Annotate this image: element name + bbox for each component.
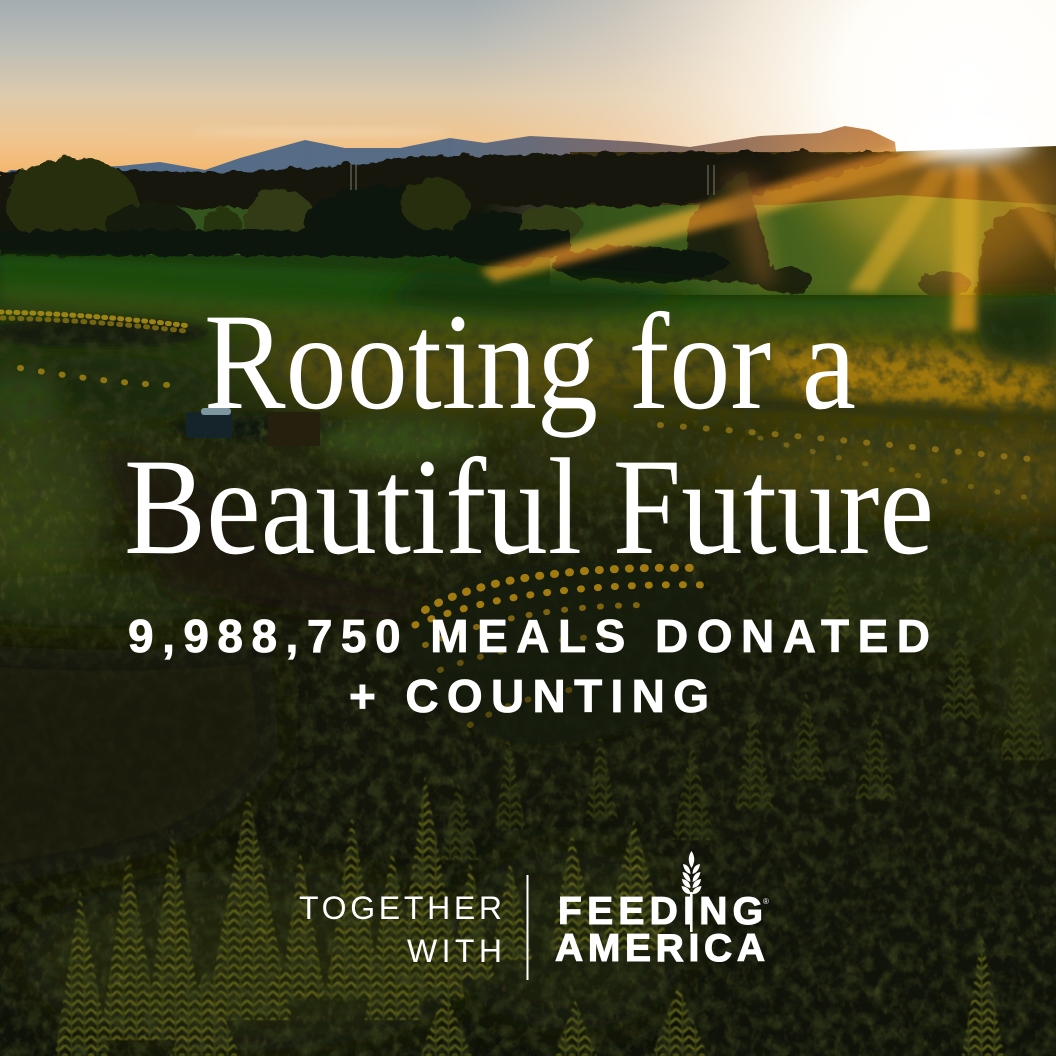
wheelbarrow and hay bale: [186, 408, 320, 446]
sunflower mound: [400, 560, 725, 745]
pylons: [350, 165, 715, 195]
field behind trees: [150, 146, 1056, 295]
ground: [0, 250, 1056, 1056]
logo wordmark: [555, 890, 765, 970]
together with: [299, 890, 502, 969]
distant mountains: [0, 126, 900, 185]
distant dim goldenrod plants: [440, 560, 1045, 860]
sun rays: [480, 150, 1056, 330]
sunflower rows: [0, 312, 1040, 500]
foreground field: [0, 256, 1056, 440]
tree line: [0, 152, 1056, 297]
Feeding America logo: [555, 851, 769, 970]
title line 2: Beautiful Future: [124, 430, 934, 583]
statistic line 2: + COUNTING: [349, 670, 709, 722]
foreground goldenrod plants: [55, 775, 1004, 1056]
logo wordmark: FEEDING: [558, 890, 763, 933]
meals donated statistic: [128, 610, 930, 722]
title line 1: Rooting for a: [204, 285, 856, 438]
sun: [902, 116, 1034, 160]
logo wordmark: AMERICA: [555, 927, 765, 970]
title: [124, 285, 934, 583]
together with: WITH: [407, 933, 502, 969]
divider: [526, 875, 528, 980]
together with: TOGETHER: [299, 890, 502, 926]
partner lockup: [299, 851, 769, 980]
sky: [0, 0, 1056, 240]
statistic line 1: 9,988,750 MEALS DONATED: [128, 610, 930, 662]
dark path through field: [0, 445, 430, 900]
wheat icon: [682, 851, 702, 932]
registered mark: ®: [763, 897, 769, 906]
foliage texture: [0, 290, 1056, 1056]
mid meadow patches: [0, 415, 1056, 1050]
